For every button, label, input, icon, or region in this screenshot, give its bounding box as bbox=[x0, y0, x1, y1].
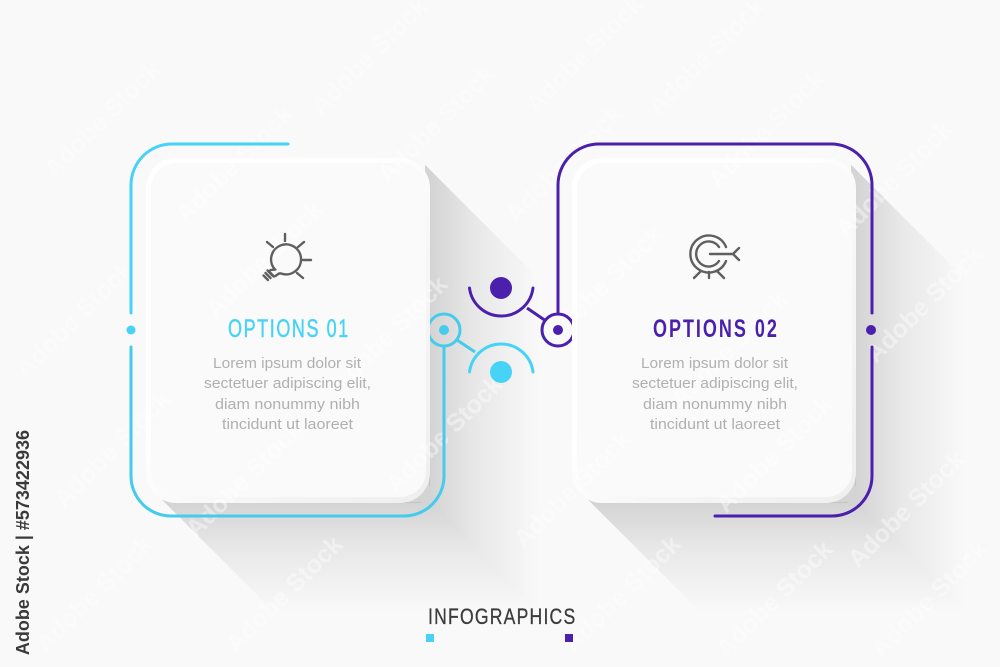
watermark: repeated stock text: Adobe Stock bbox=[220, 530, 348, 658]
watermark: repeated stock text: Adobe Stock bbox=[372, 60, 500, 188]
title: infographics: INFOGRAPHICS bbox=[428, 605, 575, 630]
watermark: repeated stock text: Adobe Stock bbox=[860, 240, 988, 368]
watermark: repeated stock text: Adobe Stock bbox=[702, 65, 830, 193]
watermark: repeated stock text: Adobe Stock bbox=[170, 100, 298, 228]
text block: options 02: sectetuer adipiscing elit, bbox=[632, 376, 798, 392]
panel: card options 02 bbox=[572, 158, 856, 503]
text block: options 01 bbox=[204, 356, 371, 433]
text block: options 01: Lorem ipsum dolor sit bbox=[213, 356, 361, 372]
watermark: repeated stock text: Adobe Stock bbox=[500, 100, 628, 228]
text block: options 01: tincidunt ut laoreet bbox=[222, 417, 353, 433]
watermark: repeated stock text: Adobe Stock bbox=[710, 535, 838, 663]
stock id label: Adobe Stock | #573422936 bbox=[13, 430, 33, 655]
watermark: repeated stock text: Adobe Stock bbox=[558, 530, 686, 658]
text block: options 01: diam nonummy nibh bbox=[215, 397, 360, 413]
watermark: repeated stock text: Adobe Stock bbox=[38, 55, 166, 183]
panel: card options 01 bbox=[146, 158, 430, 503]
long shadow: right card bbox=[583, 165, 1000, 648]
text block: options 02 bbox=[632, 356, 798, 433]
text block: options 02: Lorem ipsum dolor sit bbox=[641, 356, 788, 372]
text block: options 01: sectetuer adipiscing elit, bbox=[204, 376, 371, 392]
connector: cyan node and arc bbox=[428, 314, 533, 383]
watermark: repeated stock text: Adobe Stock bbox=[325, 270, 453, 398]
watermark: repeated stock text: Adobe Stock bbox=[48, 385, 176, 513]
watermark: repeated stock text: Adobe Stock bbox=[200, 195, 328, 323]
watermark: repeated stock text: Adobe Stock bbox=[10, 255, 138, 383]
watermark: repeated stock text: Adobe Stock bbox=[180, 415, 308, 543]
watermark: repeated stock text: Adobe Stock bbox=[508, 425, 636, 553]
watermark: repeated stock text: Adobe Stock bbox=[30, 530, 158, 658]
outline: purple frame bbox=[558, 144, 876, 516]
legend square: purple bbox=[565, 634, 573, 642]
text block: options 02: diam nonummy nibh bbox=[643, 397, 787, 413]
watermark: repeated stock text: Adobe Stock bbox=[710, 390, 838, 518]
text block: options 02: tincidunt ut laoreet bbox=[650, 417, 780, 433]
watermark: repeated stock text: Adobe Stock bbox=[540, 220, 668, 348]
heading: options 02: OPTIONS 02 bbox=[653, 314, 777, 343]
watermark: repeated stock text: Adobe Stock bbox=[865, 535, 993, 663]
watermark: repeated stock text: Adobe Stock bbox=[830, 115, 958, 243]
connector: purple node and arc bbox=[470, 277, 574, 346]
legend square: cyan bbox=[426, 634, 434, 642]
icon: target with arrow bbox=[690, 236, 739, 278]
long shadow: left card bbox=[157, 165, 575, 648]
watermark: repeated stock text: Adobe Stock bbox=[665, 285, 793, 413]
icon: light bulb bbox=[264, 234, 311, 280]
heading: options 01: OPTIONS 01 bbox=[228, 314, 348, 343]
watermark: repeated stock text: Adobe Stock bbox=[380, 370, 508, 498]
watermark: repeated stock text: Adobe Stock bbox=[842, 445, 970, 573]
outline: cyan frame bbox=[126, 144, 444, 516]
